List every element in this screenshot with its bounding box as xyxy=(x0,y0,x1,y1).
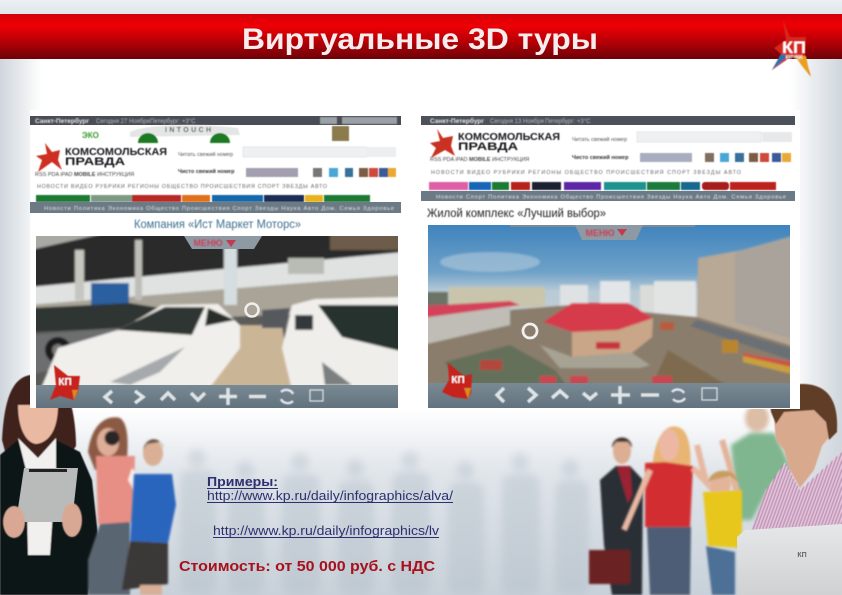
icons: player controls xyxy=(105,388,323,405)
menu links: НОВОСТИ ВИДЕО РУБРИКИ РЕГИОНЫ ОБЩЕСТВО ПРОИСШЕСТВИЯ СПОРТ ЗВЕЗДЫ АВТО xyxy=(37,184,327,190)
menu tab xyxy=(510,225,695,240)
icon: KP logo: КП xyxy=(782,38,806,57)
screenshot: residential complex page: Новости Спорт Политика Экономика Общество Происшествия Звезды Наука Авто Дом. Семья Здоровье xyxy=(436,194,786,200)
top bar xyxy=(30,116,401,125)
examples text block xyxy=(207,474,453,538)
person: woman in red xyxy=(624,426,706,595)
control bar xyxy=(36,365,398,408)
person: man in green xyxy=(731,404,792,520)
top bar: Петербург: +3°C xyxy=(545,119,591,125)
search row: Чисто свежий номер xyxy=(572,154,629,161)
top bar: Сегодня 27 Ноября xyxy=(96,119,150,125)
coloured tabs xyxy=(36,195,370,202)
icon: KP mini logo: КП xyxy=(451,375,465,386)
site logo: RSS PDA iPAD MOBILE ИНСТРУКЦИЯ xyxy=(35,172,134,178)
search row: Чисто свежий номер xyxy=(178,168,235,175)
icon: laptop xyxy=(737,524,842,595)
banner ad: ЭКО xyxy=(82,131,99,140)
search row: Читать свежий номер xyxy=(178,151,233,158)
page heading: Жилой комплекс «Лучший выбор» xyxy=(427,208,606,220)
icon: KP mini logo xyxy=(50,365,80,400)
person: man in blue shirt xyxy=(122,439,176,595)
menu tab: МЕНЮ xyxy=(586,228,614,238)
top bar: Санкт-Петербург xyxy=(35,117,89,125)
link: lv: http://www.kp.ru/daily/infographics/lv xyxy=(213,523,440,538)
coloured tabs xyxy=(429,182,776,190)
banner ad xyxy=(82,125,349,143)
nav bar xyxy=(421,191,795,201)
control bar xyxy=(428,363,790,408)
screenshot: car showroom page xyxy=(30,110,404,408)
search row xyxy=(178,147,396,177)
site logo xyxy=(35,143,167,178)
social icons xyxy=(705,153,791,162)
label: examples: Примеры: xyxy=(207,474,278,489)
icon: viewpoint ring xyxy=(246,304,258,316)
person: man with laptop xyxy=(737,384,842,595)
top bar xyxy=(421,116,795,125)
icon: laptop: КП xyxy=(797,552,807,559)
search row: Читать свежий номер xyxy=(572,136,627,143)
nav bar xyxy=(30,202,401,213)
title: Виртуальные 3D туры xyxy=(242,23,598,56)
person: businessman with briefcase xyxy=(589,438,643,595)
site logo: ПРАВДА xyxy=(458,141,518,153)
menu tab xyxy=(184,236,262,249)
banner ad: INTOUCH xyxy=(165,127,211,134)
screenshot: residential complex page xyxy=(421,110,800,409)
icon: tablet xyxy=(16,468,78,522)
panorama: showroom xyxy=(30,230,404,390)
person: woman with tablet xyxy=(0,375,99,595)
icon: KP logo: КИЧКИ xyxy=(786,55,803,61)
person: photographer xyxy=(88,417,143,595)
icons: player controls xyxy=(497,386,717,404)
blurred background crowd xyxy=(180,449,589,595)
top bar: Петербург: +3°C xyxy=(150,119,196,125)
price: Стоимость: от 50 000 руб. с НДС xyxy=(179,559,436,575)
header band xyxy=(0,14,842,59)
link: alva: http://www.kp.ru/daily/infographics/alva/ xyxy=(207,488,453,503)
top bar: Сегодня 13 Ноября xyxy=(490,119,544,125)
menu tab: МЕНЮ xyxy=(194,238,222,248)
icon: KP mini logo xyxy=(442,363,472,399)
panorama: residential xyxy=(422,225,796,390)
site logo: RSS PDA iPAD MOBILE ИНСТРУКЦИЯ xyxy=(430,157,529,163)
icon: KP mini logo: КП xyxy=(58,377,72,388)
site logo xyxy=(430,129,560,163)
person: child in yellow xyxy=(703,440,742,595)
page heading: Компания «Ист Маркет Моторс» xyxy=(134,219,301,231)
search row xyxy=(572,132,792,162)
screenshot: car showroom page: Новости Политика Экономика Общество Происшествия Спорт Звезды Наука Авто Дом. Семья Здоровье xyxy=(44,206,394,212)
social icons xyxy=(313,168,396,177)
menu links: НОВОСТИ ВИДЕО РУБРИКИ РЕГИОНЫ ОБЩЕСТВО ПРОИСШЕСТВИЯ СПОРТ ЗВЕЗДЫ АВТО xyxy=(431,170,741,176)
site logo: КОМСОМОЛЬСКАЯ xyxy=(458,131,560,143)
icon: KP logo xyxy=(772,20,811,77)
icon: viewpoint ring xyxy=(523,324,537,338)
top bar: Санкт-Петербург xyxy=(430,117,484,125)
site logo: ПРАВДА xyxy=(65,156,125,168)
site logo: КОМСОМОЛЬСКАЯ xyxy=(65,146,167,158)
